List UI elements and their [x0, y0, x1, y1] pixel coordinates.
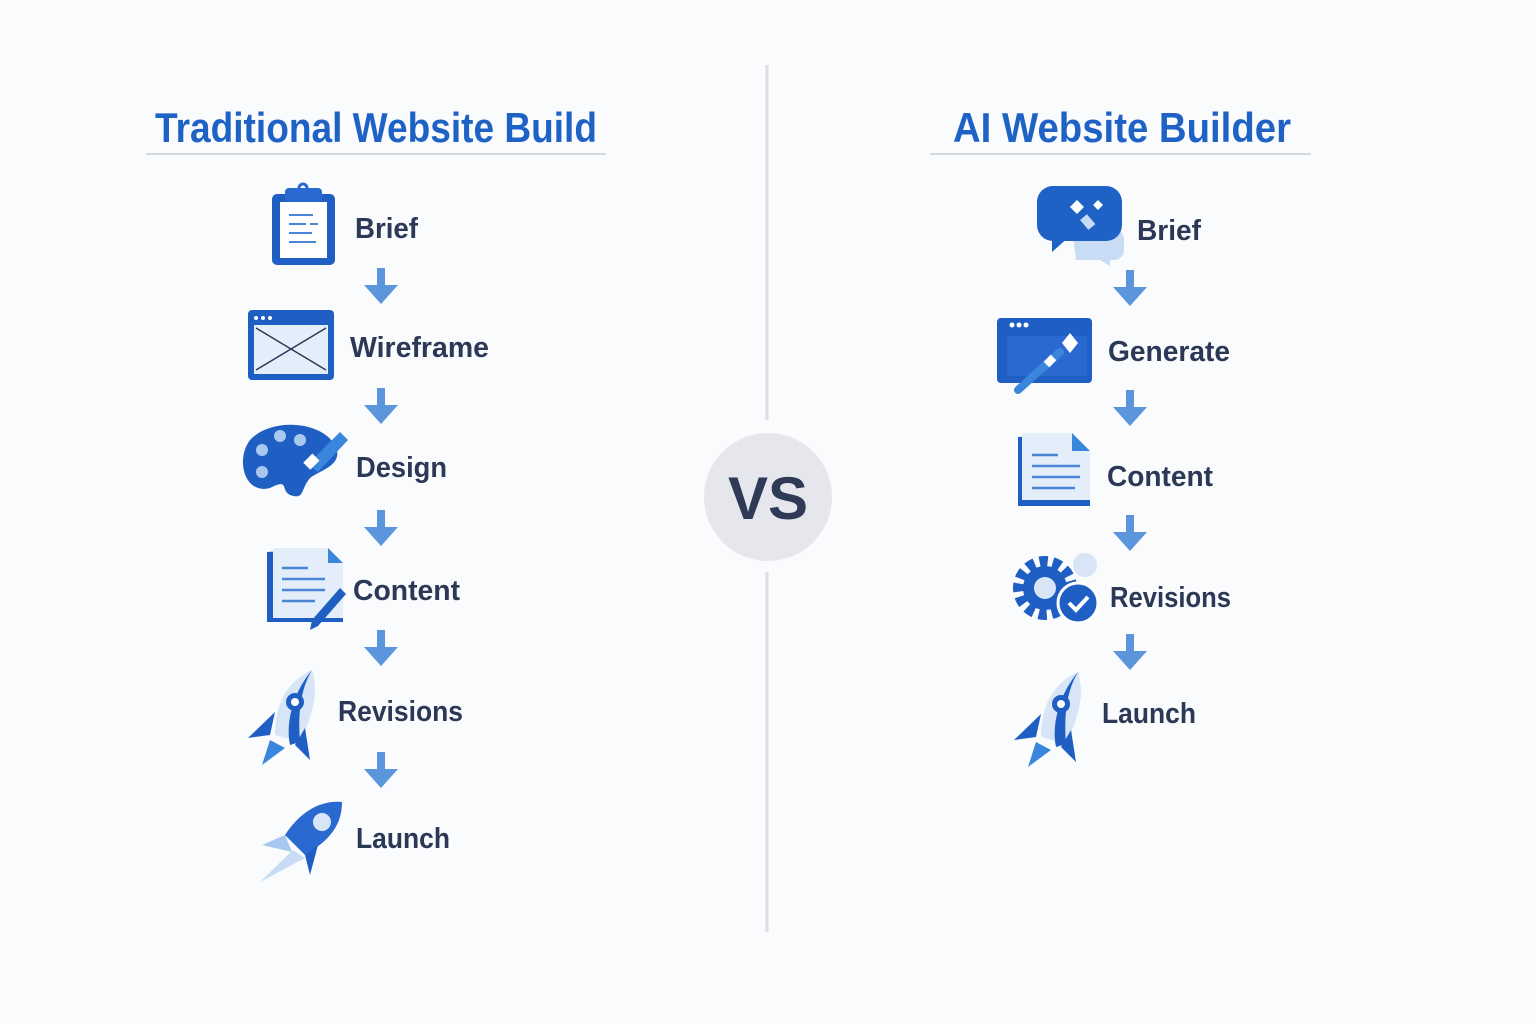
panel: ai steps	[997, 186, 1231, 767]
title: traditional: Traditional Website Build	[155, 104, 597, 151]
vs badge	[704, 433, 832, 561]
icon: content doc	[267, 548, 346, 630]
icon: launch rocket	[260, 802, 342, 882]
arrow	[364, 510, 398, 546]
panel: traditional steps	[243, 184, 489, 882]
icon: generate window	[997, 318, 1092, 390]
arrow	[1113, 634, 1147, 670]
arrow	[364, 630, 398, 666]
icon: rocket	[248, 670, 315, 765]
label: content: Content	[1107, 461, 1213, 493]
arrow	[1113, 390, 1147, 426]
icon: gear check	[1019, 553, 1098, 623]
icon: content doc	[1018, 433, 1090, 506]
vs badge: VS	[728, 465, 808, 532]
arrow	[364, 752, 398, 788]
icon: wireframe	[248, 310, 334, 380]
label: launch: Launch	[356, 823, 450, 855]
label: wireframe: Wireframe	[350, 332, 489, 364]
icon: chat sparkle	[1037, 186, 1124, 266]
arrow	[1113, 515, 1147, 551]
label: launch: Launch	[1102, 698, 1196, 730]
label: design: Design	[356, 452, 447, 484]
arrow	[364, 268, 398, 304]
label: generate: Generate	[1108, 336, 1230, 368]
label: content: Content	[353, 575, 460, 607]
icon: rocket	[1014, 672, 1081, 767]
label: revisions: Revisions	[1110, 582, 1231, 614]
label: brief: Brief	[355, 213, 418, 245]
label: brief: Brief	[1137, 215, 1201, 247]
title: ai: AI Website Builder	[953, 104, 1291, 151]
icon: palette	[243, 425, 348, 496]
arrow	[1113, 270, 1147, 306]
arrow	[364, 388, 398, 424]
label: revisions: Revisions	[338, 696, 463, 728]
icon: clipboard	[272, 184, 335, 265]
